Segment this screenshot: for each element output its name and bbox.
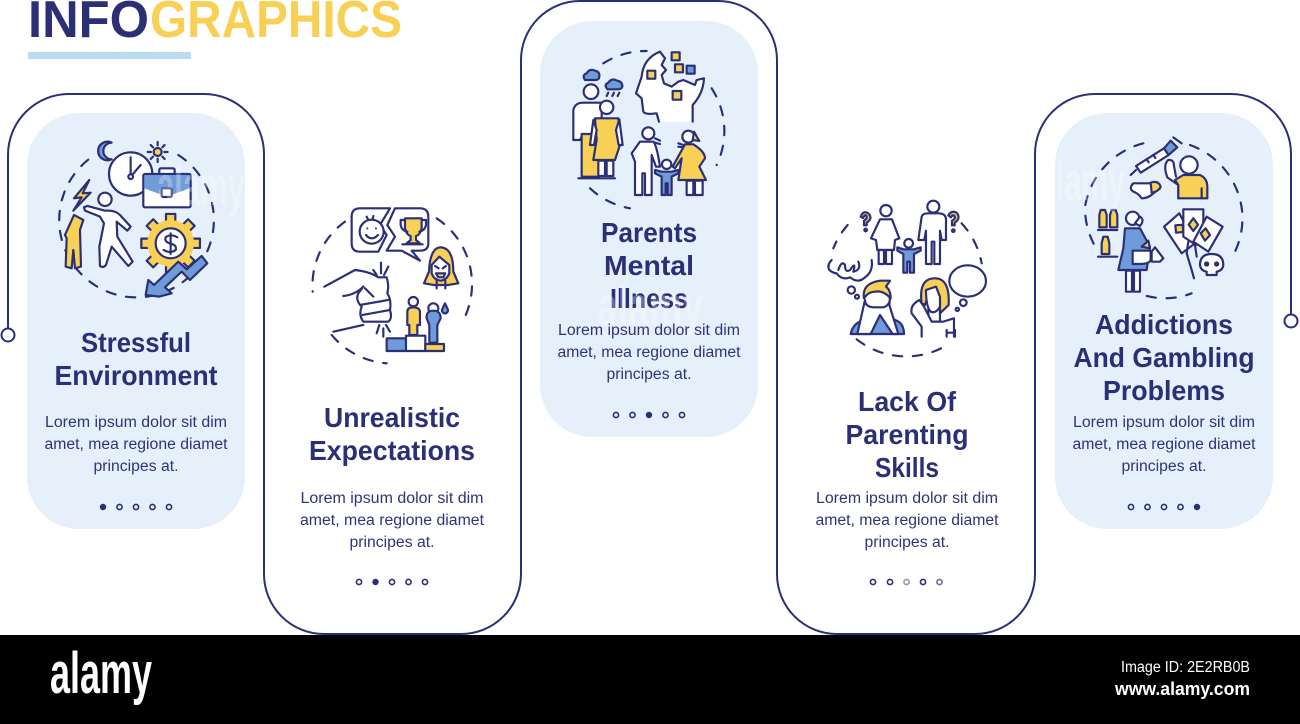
text block: addictions and gambling: principes at. — [1122, 458, 1206, 475]
icon: addictions and gambling — [1085, 137, 1242, 298]
text block: stressful environment — [44, 414, 228, 475]
text block: parents mental illness: Lorem ipsum dolor sit dim — [558, 322, 740, 339]
text block: parents mental illness — [558, 322, 741, 383]
heading: stressful environment: Environment — [54, 360, 218, 391]
text block: lack of parenting skills: principes at. — [864, 534, 950, 551]
heading: parents mental illness: Parents — [601, 217, 697, 248]
text block: stressful environment: amet, mea regione diamet — [44, 436, 228, 453]
text block: parents mental illness: amet, mea regione diamet — [558, 344, 741, 361]
text block: parents mental illness: principes at. — [606, 366, 692, 383]
title underline — [28, 52, 191, 59]
pagination dots 5 — [1128, 504, 1200, 510]
text block: unrealistic expectations: amet, mea regione diamet — [300, 512, 485, 529]
heading: addictions and gambling: Addictions — [1095, 309, 1233, 340]
heading: parents mental illness — [601, 217, 697, 314]
footer image id: Image ID: 2E2RB0B — [1121, 659, 1250, 676]
text block: stressful environment: Lorem ipsum dolor sit dim — [45, 414, 227, 431]
pagination dots 4 — [870, 579, 942, 585]
pagination dots 3 — [613, 412, 685, 418]
icon: stressful environment — [59, 142, 214, 297]
heading: stressful environment — [54, 327, 218, 391]
panel: backgrounds — [27, 21, 1273, 529]
heading: unrealistic expectations: Expectations — [309, 435, 475, 466]
heading: addictions and gambling: And Gambling — [1074, 342, 1254, 373]
heading: unrealistic expectations: Unrealistic — [324, 402, 460, 433]
icon: parents mental illness — [573, 51, 724, 208]
heading: lack of parenting skills: Parenting — [846, 419, 968, 450]
watermark: panel 5: lamy — [1056, 149, 1125, 212]
icon: lack of parenting skills — [828, 201, 986, 356]
watermark: panel 1: alamy — [157, 154, 245, 217]
text block: addictions and gambling: Lorem ipsum dolor sit dim — [1073, 414, 1255, 431]
footer bar — [0, 635, 1300, 724]
text block: stressful environment: principes at. — [94, 458, 178, 475]
heading: parents mental illness: Mental — [604, 250, 694, 281]
heading: addictions and gambling: Problems — [1103, 375, 1225, 406]
watermark: panel 3: alamy — [597, 274, 703, 337]
pagination dots 1 — [100, 504, 172, 510]
text block: unrealistic expectations — [300, 490, 485, 551]
heading: lack of parenting skills: Skills — [875, 452, 939, 483]
footer url: www.alamy.com — [1114, 679, 1250, 699]
text block: lack of parenting skills: amet, mea regione diamet — [816, 512, 999, 529]
pagination dots 2 — [356, 579, 428, 585]
text block: lack of parenting skills: Lorem ipsum dolor sit dim — [816, 490, 998, 507]
footer logo: alamy — [50, 641, 152, 706]
text block: unrealistic expectations: principes at. — [350, 534, 434, 551]
text block: addictions and gambling: amet, mea regione diamet — [1072, 436, 1256, 453]
text block: unrealistic expectations: Lorem ipsum dolor sit dim — [300, 490, 484, 507]
heading: addictions and gambling — [1074, 309, 1254, 406]
heading: parents mental illness: Illness — [610, 283, 688, 314]
heading: lack of parenting skills — [846, 386, 968, 483]
heading: unrealistic expectations — [309, 402, 475, 466]
text block: addictions and gambling — [1072, 414, 1256, 475]
title — [28, 0, 402, 49]
heading: stressful environment: Stressful — [81, 327, 191, 358]
text block: lack of parenting skills — [816, 490, 999, 551]
heading: lack of parenting skills: Lack Of — [858, 386, 957, 417]
icon: unrealistic expectations — [312, 208, 472, 363]
